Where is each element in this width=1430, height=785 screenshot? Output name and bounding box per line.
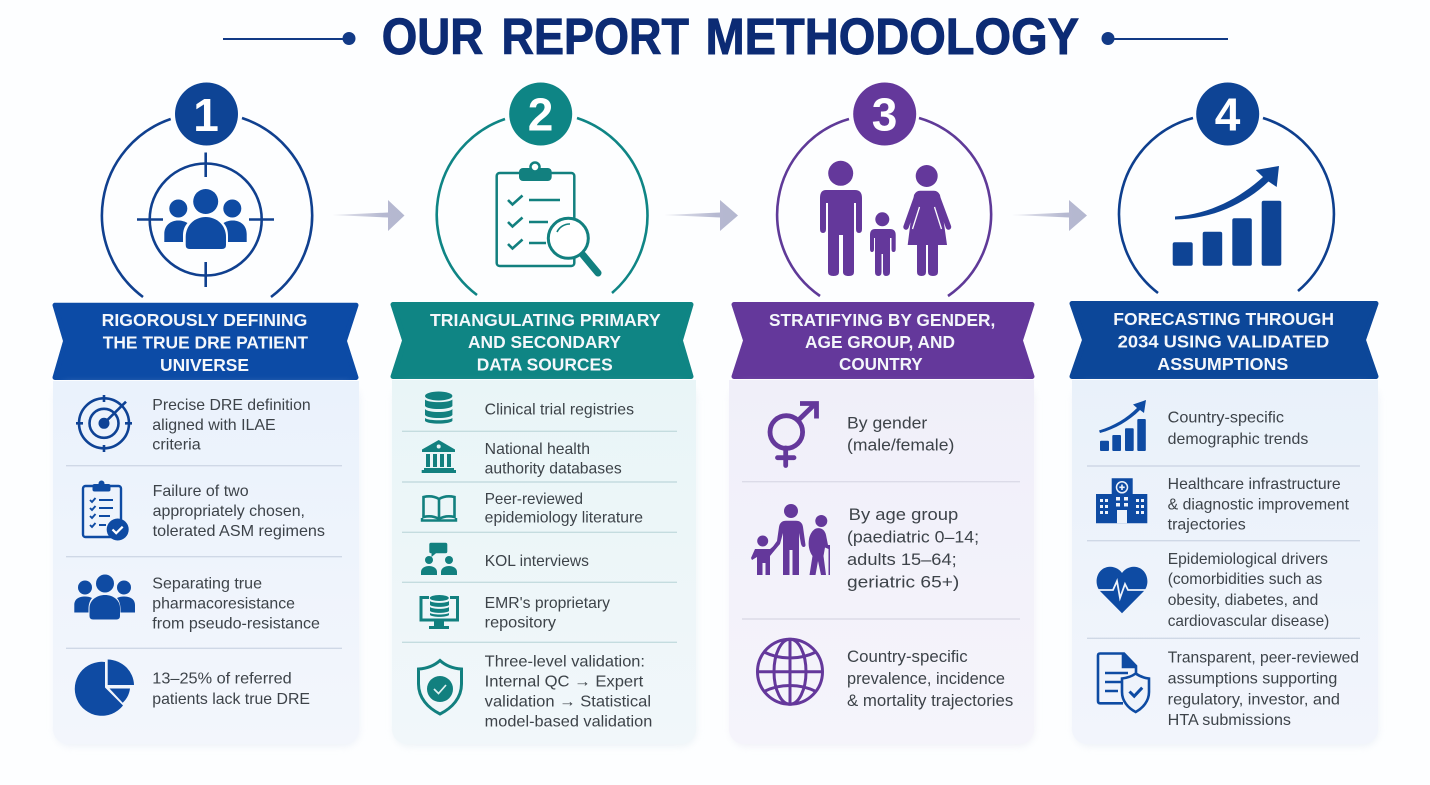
- step 3 ribbon heading: COUNTRY: [839, 354, 923, 374]
- panel: step 3 stratifying: [729, 82, 1034, 746]
- text: by gender: (male/female): [847, 436, 954, 455]
- text: DRE definition: Precise DRE definition: [152, 397, 311, 414]
- text: demographic trends: Country-specific: [1168, 410, 1284, 427]
- step 2 ribbon heading: TRIANGULATING PRIMARY: [430, 310, 661, 330]
- step 3 details card: [729, 380, 1034, 746]
- text: health authorities: National health: [485, 441, 590, 458]
- text: epidemiological drivers: obesity, diabetes, and: [1168, 592, 1318, 609]
- step 3 ribbon heading: STRATIFYING BY GENDER,: [769, 310, 995, 330]
- text: healthcare infrastructure: Healthcare infrastructure: [1168, 476, 1341, 493]
- icon: demographic chart: [1099, 400, 1146, 451]
- icon: growth chart: [1173, 166, 1281, 266]
- step 1 ring: [102, 118, 312, 297]
- text: country trajectories: [847, 647, 1013, 710]
- step 1 ribbon heading: UNIVERSE: [160, 355, 249, 375]
- text: pseudo-resistance: Separating true: [152, 576, 262, 592]
- text: proprietary repository: repository: [485, 614, 556, 631]
- text: by age group: (paediatric 0–14;: [847, 528, 979, 547]
- step 4 ribbon heading: FORECASTING THROUGH: [1113, 309, 1334, 329]
- step 1 number badge: [175, 82, 238, 146]
- text: transparent assumptions: regulatory, investor, and: [1168, 691, 1340, 708]
- text: three-level validation: Three-level validation:: [485, 654, 645, 671]
- text: literature: epidemiology literature: [485, 510, 643, 527]
- step 2 ribbon heading: [393, 304, 691, 376]
- step 3 number badge: [853, 82, 916, 146]
- text: KOL interviews: KOL interviews: [485, 553, 589, 570]
- text: transparent assumptions: assumptions supporting: [1168, 670, 1337, 687]
- text: failed regimens: Failure of two: [153, 483, 249, 500]
- title: [223, 8, 1228, 65]
- icon: patients in crosshair: [137, 152, 274, 287]
- icon: computer with database: [421, 595, 458, 629]
- text: pseudo-resistance: from pseudo-resistance: [152, 616, 320, 632]
- step 3 number badge: 3: [872, 88, 897, 140]
- text: DRE definition: criteria: [152, 436, 201, 454]
- icon: validation shield: [418, 660, 462, 714]
- text: proprietary repository: EMR's proprietary: [485, 595, 610, 612]
- icon: bullseye target: [76, 395, 132, 452]
- text: epidemiological drivers: cardiovascular disease): [1168, 613, 1329, 630]
- panel: step 2 triangulating data sources: [392, 82, 696, 746]
- text: registries: Clinical trial registries: [485, 402, 634, 419]
- text: failed regimens: tolerated ASM regimens: [153, 523, 325, 540]
- icon: heart with pulse: [1097, 567, 1147, 613]
- text: failed regimens: appropriately chosen,: [153, 503, 305, 520]
- title: REPORT: [502, 8, 689, 65]
- text: literature: [485, 491, 643, 527]
- icon: government building: [422, 440, 456, 473]
- text: health authorities: [485, 441, 622, 477]
- text: pseudo-resistance: pharmacoresistance: [152, 596, 295, 612]
- icon: clipboard with magnifier: [497, 162, 598, 273]
- text: healthcare infrastructure: & diagnostic improvement: [1168, 496, 1350, 513]
- title: OUR: [382, 8, 483, 65]
- text: failed regimens: [153, 483, 325, 540]
- text: by age group: adults 15–64;: [847, 550, 957, 569]
- text: literature: Peer-reviewed: [485, 491, 583, 508]
- icon: database: [425, 392, 452, 424]
- step 3 ring: [777, 118, 991, 296]
- step 1 number badge: 1: [193, 89, 219, 141]
- text: country trajectories: prevalence, incidence: [847, 669, 1005, 688]
- step 4 ribbon heading: 2034 USING VALIDATED: [1118, 331, 1329, 351]
- text: by age group: geriatric 65+): [847, 572, 959, 591]
- text: demographic trends: [1168, 410, 1309, 448]
- text: three-level validation: [485, 654, 652, 731]
- text: three-level validation: Internal QC → Expert: [485, 674, 644, 691]
- text: by age group: By age group: [849, 505, 958, 524]
- icon: document with shield: [1098, 654, 1149, 712]
- step 1 details card: [53, 381, 359, 746]
- icon: checklist clipboard: [83, 480, 129, 540]
- text: demographic trends: demographic trends: [1168, 431, 1309, 448]
- step 4 details card: [1072, 380, 1378, 746]
- text: country trajectories: Country-specific: [847, 647, 968, 666]
- step 3 ribbon heading: AGE GROUP, AND: [805, 332, 955, 352]
- panel: step 4 forecasting: [1072, 82, 1378, 746]
- text: three-level validation: validation → Statistical: [485, 694, 651, 711]
- text: DRE definition: aligned with ILAE: [152, 417, 276, 434]
- icon: pie chart: [75, 660, 134, 716]
- step 4 ribbon heading: ASSUMPTIONS: [1157, 354, 1288, 374]
- step 2 ribbon heading: DATA SOURCES: [477, 354, 613, 374]
- step 2 details card: [392, 380, 696, 746]
- step 2 ring: [437, 118, 647, 295]
- panel: step 1 defining the patient universe: [53, 82, 359, 746]
- text: 13–25% statistic: 13–25% of referred: [152, 670, 292, 688]
- text: by gender: By gender: [847, 413, 928, 432]
- text: epidemiological drivers: [1168, 551, 1329, 630]
- text: healthcare infrastructure: trajectories: [1168, 516, 1246, 533]
- text: epidemiological drivers: Epidemiological drivers: [1168, 551, 1328, 568]
- text: 13–25% statistic: [152, 670, 310, 708]
- step 3 ribbon heading: [734, 304, 1032, 376]
- step 2 number badge: [509, 82, 572, 146]
- step 2 ribbon heading: AND SECONDARY: [468, 332, 621, 352]
- text: health authorities: authority databases: [485, 460, 622, 477]
- text: by age group: [847, 505, 979, 591]
- icon: group of people: [74, 574, 135, 620]
- icon: KOL interviews: [421, 543, 457, 575]
- icon: hospital: [1096, 478, 1147, 523]
- arrow: step 3 to step 4: [1012, 200, 1087, 231]
- text: 13–25% statistic: patients lack true DRE: [152, 691, 310, 708]
- text: three-level validation: model-based validation: [485, 714, 652, 731]
- step 2 number badge: 2: [528, 88, 553, 140]
- text: pseudo-resistance: [152, 576, 320, 632]
- step 1 ribbon heading: [55, 305, 356, 378]
- text: transparent assumptions: [1168, 650, 1359, 729]
- text: transparent assumptions: Transparent, peer-reviewed: [1168, 650, 1359, 667]
- text: proprietary repository: [485, 595, 610, 631]
- text: country trajectories: & mortality trajectories: [847, 691, 1013, 710]
- step 4 number badge: [1196, 82, 1259, 146]
- step 1 ribbon heading: RIGOROUSLY DEFINING: [102, 310, 307, 330]
- step 4 ring: [1119, 118, 1334, 293]
- text: DRE definition: [152, 397, 311, 454]
- text: healthcare infrastructure: [1168, 476, 1350, 533]
- text: by gender: [847, 413, 954, 455]
- icon: family: [820, 161, 948, 276]
- icon: globe: [758, 639, 822, 704]
- text: transparent assumptions: HTA submissions: [1168, 712, 1291, 729]
- title: METHODOLOGY: [706, 8, 1079, 65]
- icon: open book: [422, 496, 456, 520]
- step 4 ribbon heading: [1072, 304, 1376, 376]
- arrow: step 1 to step 2: [332, 200, 404, 231]
- icon: age group people: [751, 504, 830, 575]
- step 4 number badge: 4: [1215, 88, 1241, 140]
- arrow: step 2 to step 3: [664, 200, 738, 231]
- step 1 ribbon heading: THE TRUE DRE PATIENT: [103, 332, 308, 352]
- icon: gender symbol: [770, 404, 816, 466]
- text: epidemiological drivers: (comorbidities such as: [1168, 571, 1322, 588]
